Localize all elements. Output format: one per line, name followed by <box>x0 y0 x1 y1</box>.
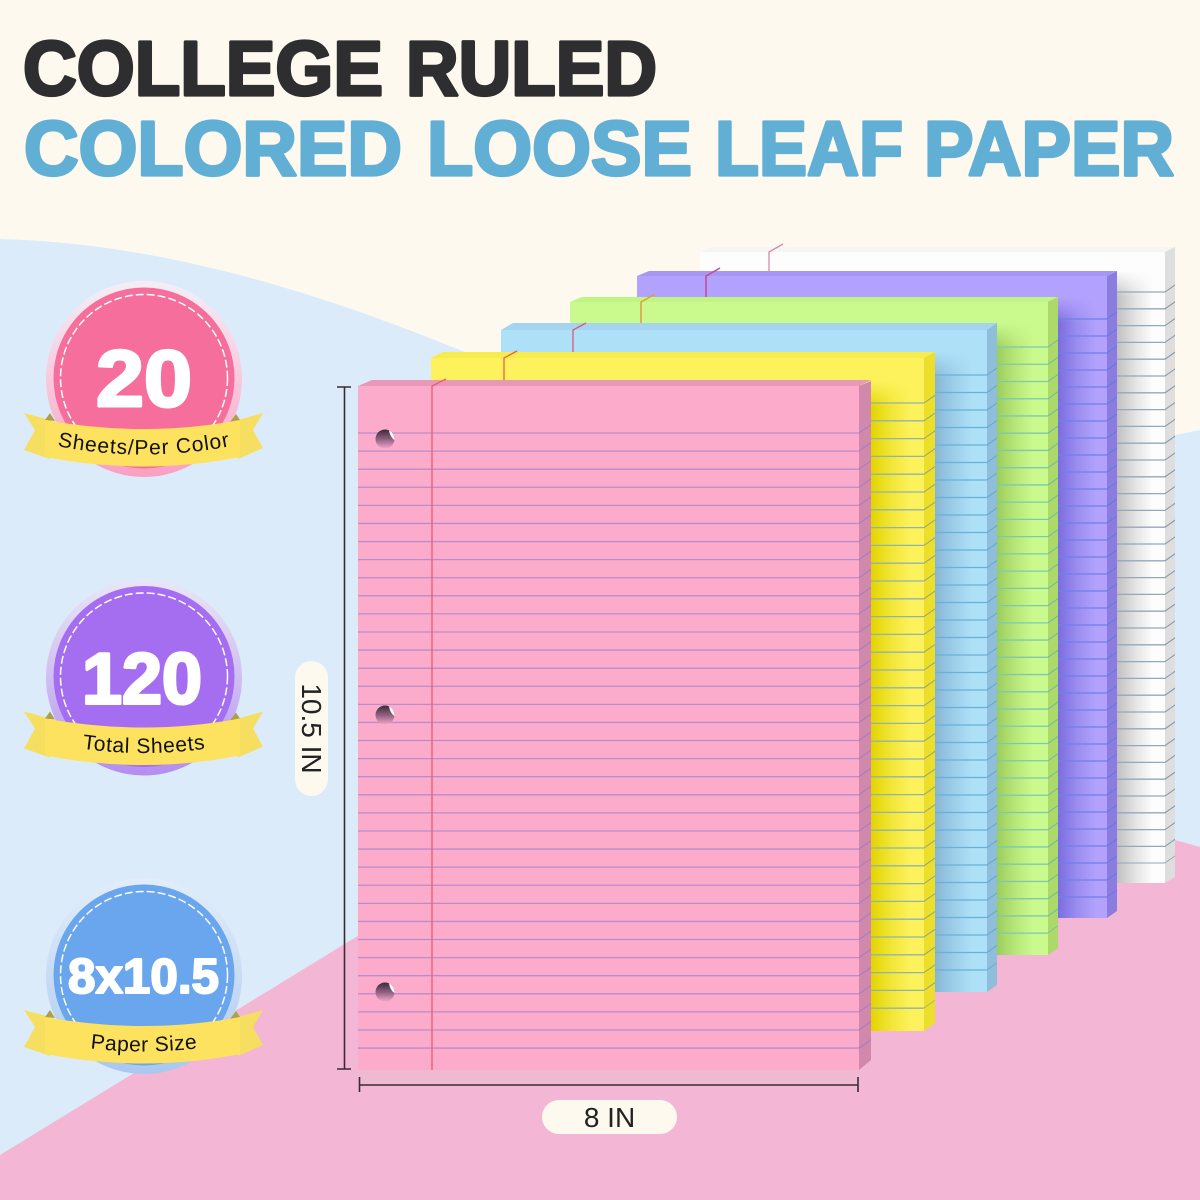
title <box>23 26 1174 192</box>
punched hole 3 <box>376 982 394 1002</box>
title line 2: LOOSE <box>427 106 692 192</box>
width dimension arrow <box>360 1077 858 1092</box>
ribbon <box>24 712 263 765</box>
pink sheet margin line <box>432 379 446 1070</box>
title line 2 <box>24 106 1174 192</box>
dashed stitch ring <box>60 294 228 462</box>
ribbon label: Sheets/Per Color <box>58 432 228 454</box>
height label pill <box>295 661 328 796</box>
height dimension arrow <box>337 387 351 1069</box>
paper stack: white sheet <box>700 244 1175 883</box>
paper stack: purple sheet <box>637 268 1117 918</box>
punched hole 2 <box>376 706 394 724</box>
pink sheet top edge <box>358 380 871 386</box>
badge number: 8x10.5 <box>68 950 219 1004</box>
badge disc <box>54 884 234 1066</box>
title line 1: COLLEGE <box>23 26 383 112</box>
pink sheet edge lines <box>859 428 871 1045</box>
punched hole 1 <box>376 430 394 448</box>
badge number: 20 <box>96 334 192 423</box>
badge number: 120 <box>82 640 202 720</box>
pink sheet right edge <box>859 381 871 1070</box>
paper stack: blue sheet <box>501 323 997 992</box>
dashed stitch ring <box>60 892 228 1058</box>
pink sheet ruled lines <box>358 432 859 1049</box>
strip under pink sheet <box>358 1070 859 1085</box>
pink sheet face <box>358 386 859 1070</box>
ribbon <box>24 1010 263 1064</box>
badge: 20 sheets per color <box>24 281 263 477</box>
badge disc <box>54 288 234 468</box>
badge halo <box>46 281 242 477</box>
title line 2: COLORED <box>24 106 402 192</box>
badge halo <box>46 580 242 776</box>
dashed stitch ring <box>60 593 228 760</box>
paper stack: pink front sheet <box>358 379 871 1070</box>
badge: 120 total sheets <box>24 580 263 776</box>
title line 2: LEAF <box>715 106 903 192</box>
background: pink wave <box>0 762 1200 1200</box>
ribbon <box>24 413 263 466</box>
badge: 8x10.5 paper size <box>24 884 263 1074</box>
badge halo <box>46 878 242 1074</box>
title line 1: RULED <box>406 26 657 112</box>
ribbon label: Paper Size <box>92 1034 196 1056</box>
paper stack: yellow sheet <box>431 351 935 1031</box>
title line 2: PAPER <box>924 106 1174 192</box>
height label pill: 10.5 IN <box>296 683 327 774</box>
ribbon label: Total Sheets <box>84 734 204 754</box>
badge disc <box>54 586 234 767</box>
width label pill: 8 IN <box>584 1102 635 1133</box>
paper stack: green sheet <box>570 294 1058 955</box>
width label pill <box>542 1100 677 1134</box>
title line 1 <box>23 26 657 112</box>
